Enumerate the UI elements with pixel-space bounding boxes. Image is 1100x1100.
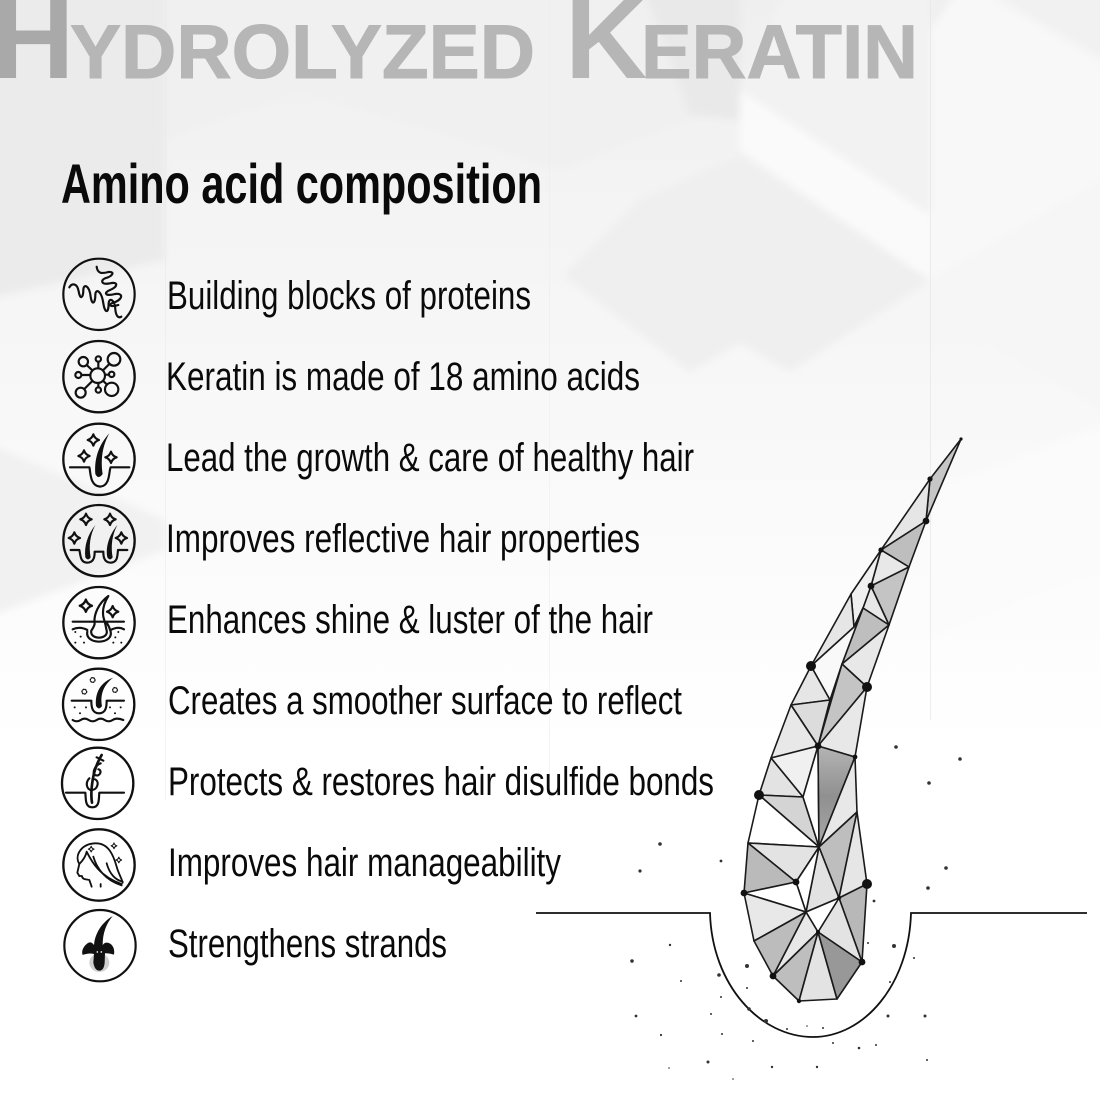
strand nodes (741, 437, 963, 1003)
low-poly hair strand (744, 439, 961, 1001)
heading: Amino acid composition: Amino acid composition (61, 152, 542, 215)
icon: strong strands (64, 910, 136, 981)
icon: protein helix (63, 259, 135, 330)
hair follicle illustration (536, 437, 1087, 1080)
icon: amino acid molecule (63, 341, 135, 412)
list row 7 text: Protects & restores hair disulfide bonds (168, 760, 714, 804)
list row 5 text: Enhances shine & luster of the hair (167, 598, 653, 642)
list row 6 text: Creates a smoother surface to reflect (168, 679, 682, 723)
icon: smoother surface (63, 669, 134, 740)
list row 8 text: Improves hair manageability (168, 841, 561, 885)
icon: hair growth (63, 424, 135, 495)
scattered particles (630, 745, 962, 1080)
icon: disulfide bonds (62, 748, 133, 819)
title: Hydrolyzed Keratin (0, 0, 918, 103)
list row 4 text: Improves reflective hair properties (166, 517, 640, 561)
icon: shine and luster (63, 587, 135, 658)
list row 9 text: Strengthens strands (168, 922, 447, 966)
icon: manageable hair (63, 829, 135, 901)
list row 2 text: Keratin is made of 18 amino acids (166, 355, 640, 399)
benefit list (166, 274, 714, 966)
scalp line and follicle (536, 913, 1087, 1037)
title: Hydrolyzed Keratin: YDROLYZED (70, 10, 535, 95)
list row 3 text: Lead the growth & care of healthy hair (166, 436, 694, 480)
list row 1 text: Building blocks of proteins (167, 274, 531, 318)
title: Hydrolyzed Keratin: ERATIN (641, 10, 918, 95)
icon: reflective hair (63, 505, 135, 576)
